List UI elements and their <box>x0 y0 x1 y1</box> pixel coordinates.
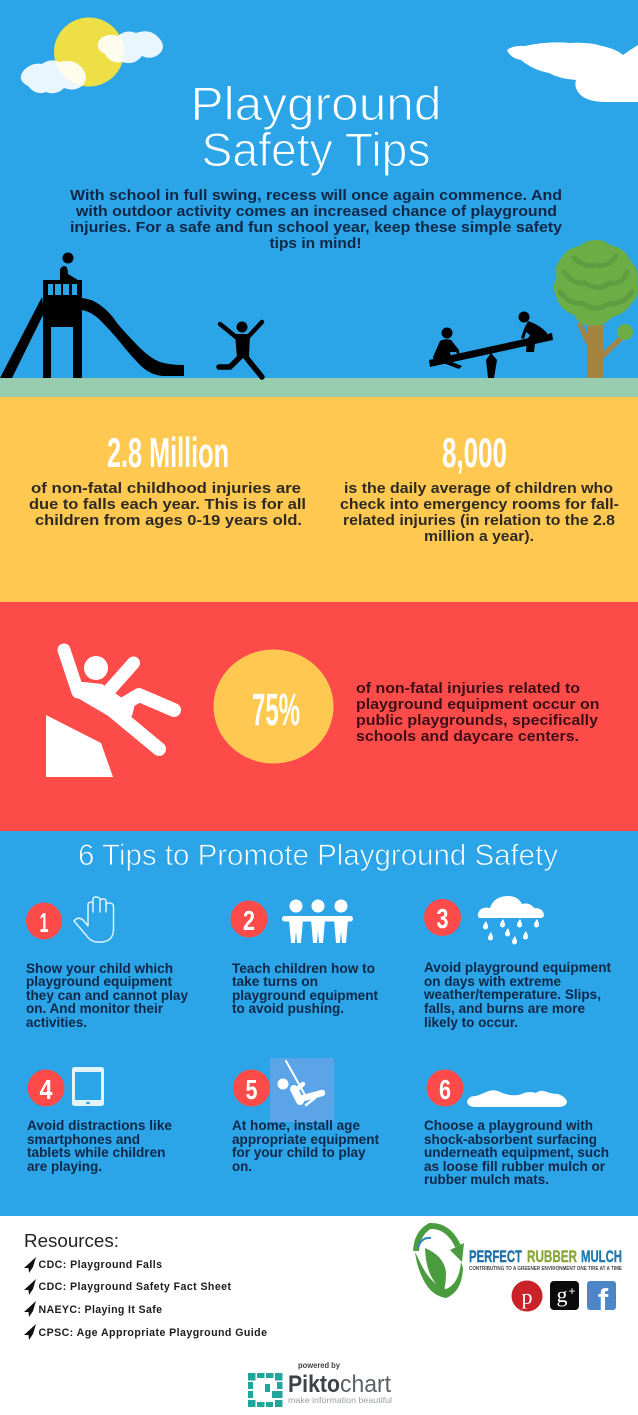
text: piktochart wordmark: chart <box>340 1371 391 1398</box>
list: resources <box>24 1257 267 1340</box>
icon: piktochart mark <box>248 1373 282 1407</box>
text: tip 1: on. And monitor their <box>26 1001 164 1016</box>
text: tip 4 <box>27 1118 172 1174</box>
text: public playgrounds: schools and daycare centers. <box>356 729 579 745</box>
icon: facebook <box>587 1281 616 1317</box>
text: tip 2: take turns on <box>232 974 318 989</box>
icon: google plus: + <box>568 1284 576 1298</box>
intro text: with outdoor activity comes an increased chance of playground <box>75 203 557 220</box>
badge: number 6 <box>426 1070 464 1106</box>
icon: jumping child <box>219 322 262 377</box>
text: falls each year <box>29 480 306 529</box>
text: tip 2: playground equipment <box>232 988 378 1003</box>
icon: google plus: g <box>556 1282 568 1307</box>
stat: 2.8 Million: 2.8 Million <box>107 429 229 476</box>
text: tip 2: to avoid pushing. <box>232 1001 344 1016</box>
text: tip 5: At home, install age <box>232 1118 360 1133</box>
icon: three children <box>282 900 353 943</box>
text: piktochart tagline: make information beautiful <box>288 1395 392 1405</box>
text: daily average: check into emergency rooms for fall- <box>340 496 619 513</box>
text: tip 6: rubber mulch mats. <box>424 1172 549 1187</box>
icon: yellow circle <box>214 650 334 764</box>
text: public playgrounds: public playgrounds, specifically <box>356 713 599 729</box>
text: tip 3: Avoid playground equipment <box>424 960 611 975</box>
text: tip 4: are playing. <box>27 1159 102 1174</box>
icon: cloud lower left <box>21 60 86 93</box>
text: piktochart wordmark: Pikto <box>288 1371 340 1398</box>
text: tip 2 <box>232 961 378 1016</box>
text: tip 1: they can and cannot play <box>26 988 188 1003</box>
intro text: injuries. For a safe and fun school year, keep these simple safety <box>70 219 563 236</box>
text: tip 6: underneath equipment, such <box>424 1145 609 1160</box>
icon: cloud top right <box>507 42 638 102</box>
icon: child on swing <box>278 1061 322 1105</box>
title: Playground <box>190 77 442 130</box>
icon: google plus <box>550 1281 579 1310</box>
icon: pinterest <box>512 1280 542 1312</box>
icon: rain cloud <box>478 896 544 945</box>
badge: number 3 <box>424 899 461 936</box>
resource 4: CPSC: Age Appropriate Playground Guide <box>38 1327 267 1339</box>
badge: number 1: 1 <box>40 907 48 938</box>
text: tip 5 <box>232 1118 379 1174</box>
icon: tablet <box>72 1067 104 1106</box>
icon: swing square <box>270 1058 334 1122</box>
title: Safety Tips <box>202 123 430 176</box>
badge: number 5: 5 <box>246 1074 258 1105</box>
text: tip 6: Choose a playground with <box>424 1118 593 1133</box>
icon: hand <box>74 897 114 942</box>
resource 3: NAEYC: Playing It Safe <box>38 1304 162 1316</box>
resource 1: CDC: Playground Falls <box>38 1259 162 1271</box>
text: tip 2: Teach children how to <box>232 961 375 976</box>
resource 2: CDC: Playground Safety Fact Sheet <box>38 1281 231 1293</box>
resource 2 <box>24 1279 231 1295</box>
panel: statistics <box>0 397 638 602</box>
logo: piktochart <box>248 1371 392 1407</box>
badge: number 1 <box>26 902 62 940</box>
text: tip 3: falls, and burns are more <box>424 1001 585 1016</box>
text: tip 1 <box>26 961 188 1030</box>
badge: number 3: 3 <box>436 903 448 934</box>
intro text <box>70 187 563 252</box>
icon: seesaw with children <box>429 312 553 378</box>
icon: recycling leaf <box>415 1226 464 1298</box>
panel: 75 percent <box>0 602 638 831</box>
text: tip 6 <box>424 1118 609 1187</box>
text: tip 4: Avoid distractions like <box>27 1118 172 1133</box>
icon: cloud upper <box>98 31 163 63</box>
tip 3 <box>423 896 611 1030</box>
text: tip 3: likely to occur. <box>424 1015 518 1030</box>
text: public playgrounds <box>356 681 600 745</box>
text: tip 6: shock-absorbent surfacing <box>424 1132 597 1147</box>
icon: facebook: f <box>598 1282 609 1317</box>
stat: 75%: 75% <box>252 684 300 735</box>
icon: falling figure <box>46 650 174 777</box>
tip 4 <box>27 1067 172 1174</box>
text: public playgrounds: of non-fatal injuries related to <box>356 681 580 697</box>
text: falls each year: of non-fatal childhood injuries are <box>31 480 301 497</box>
text: falls each year: due to falls each year. This is for all <box>29 496 306 513</box>
text: brand name: PERFECT <box>469 1247 522 1266</box>
text: tip 4: smartphones and <box>27 1132 140 1147</box>
icon: ground <box>0 378 638 397</box>
heading: tips: 6 Tips to Promote Playground Safety <box>78 839 558 872</box>
text: tip 3: weather/temperature. Slips, <box>423 987 601 1002</box>
text: brand name: RUBBER <box>527 1247 577 1266</box>
text: daily average: million a year). <box>424 528 534 545</box>
tip 6 <box>424 1070 609 1187</box>
text: brand name <box>469 1247 622 1266</box>
badge: number 6: 6 <box>439 1074 451 1105</box>
tip 2 <box>230 900 378 1016</box>
text: tip 6: as loose fill rubber mulch or <box>424 1159 606 1174</box>
text: tip 4: tablets while children <box>27 1145 166 1160</box>
badge: number 4: 4 <box>40 1074 53 1105</box>
icon: pinterest: p <box>522 1284 532 1309</box>
badge: number 4 <box>28 1070 64 1106</box>
text: tip 5: on. <box>232 1159 252 1174</box>
badge: number 5 <box>233 1070 270 1106</box>
text: public playgrounds: playground equipment occur on <box>356 697 600 713</box>
logo: perfect rubber mulch <box>415 1226 622 1317</box>
badge: number 2: 2 <box>243 905 255 936</box>
text: powered by: powered by <box>298 1360 340 1370</box>
icon: sun <box>54 18 124 86</box>
intro text: With school in full swing, recess will once again commence. And <box>70 187 562 204</box>
text: tip 5: appropriate equipment <box>232 1132 379 1147</box>
panel: tips <box>0 831 638 1216</box>
text: tip 3 <box>423 960 611 1030</box>
intro text: tips in mind! <box>270 235 362 252</box>
text: tip 3: on days with extreme <box>424 974 561 989</box>
title <box>190 77 442 176</box>
text: daily average: related injuries (in relation to the 2.8 <box>343 512 615 529</box>
text: tip 1: Show your child which <box>26 961 173 976</box>
text: piktochart wordmark <box>288 1371 391 1398</box>
resource 1 <box>24 1257 162 1273</box>
text: daily average: is the daily average of children who <box>344 480 613 497</box>
stat: 8,000: 8,000 <box>442 429 507 476</box>
icon: rubber mulch <box>467 1090 567 1107</box>
panel: hero sky <box>0 0 638 398</box>
icon: slide with child <box>0 252 184 378</box>
panel: footer <box>0 1216 638 1415</box>
text: falls each year: children from ages 0-19 years old. <box>35 512 302 529</box>
text: tip 1: playground equipment <box>26 974 172 989</box>
text: tip 5: for your child to play <box>232 1145 366 1160</box>
resource 3 <box>24 1301 162 1317</box>
heading: resources: Resources: <box>24 1230 119 1251</box>
badge: number 2 <box>230 900 268 938</box>
tip 1 <box>26 897 188 1030</box>
tip 5 <box>232 1058 379 1174</box>
icon: tree <box>554 240 638 378</box>
text: daily average <box>340 480 619 545</box>
text: tip 1: activities. <box>26 1015 87 1030</box>
